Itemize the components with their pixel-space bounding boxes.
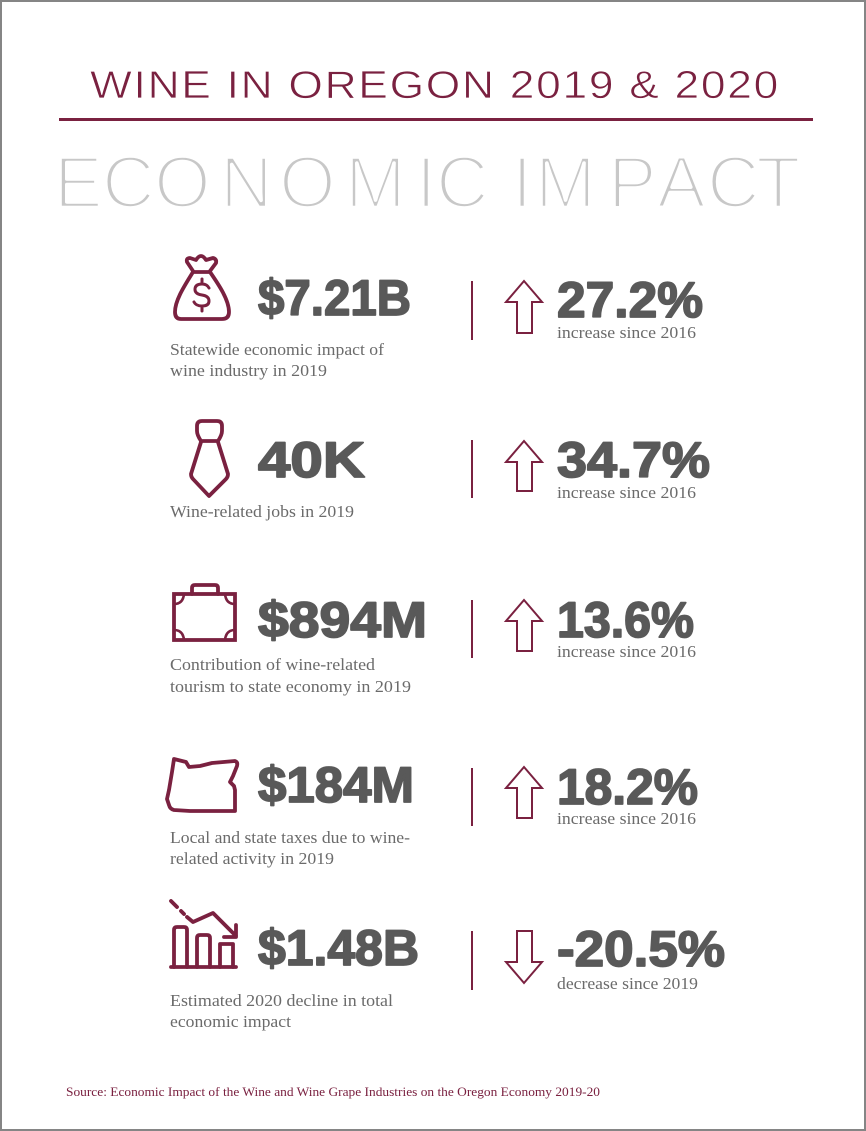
icon: Oregon state outline: [167, 759, 237, 811]
description: Estimated 2020 decline in total: [170, 991, 393, 1010]
description: [170, 991, 393, 1031]
description: related activity in 2019: [170, 849, 334, 868]
change note: increase since 2016: [557, 642, 696, 661]
arrow up: [506, 281, 542, 333]
description: Statewide economic impact of: [170, 340, 385, 359]
value: $7.21B: [258, 270, 411, 326]
arrow down: [506, 931, 542, 983]
description: economic impact: [170, 1012, 291, 1031]
description: [170, 828, 410, 868]
divider: [471, 768, 473, 826]
row: tourism: [170, 585, 696, 696]
percent change: -20.5%: [557, 921, 725, 977]
icon: money bag: [175, 256, 229, 319]
row: 2020 decline: [170, 901, 725, 1031]
description: tourism to state economy in 2019: [170, 677, 411, 696]
description: wine industry in 2019: [170, 361, 327, 380]
row: jobs: [170, 421, 710, 521]
percent change: 27.2%: [557, 272, 703, 328]
percent change: 34.7%: [557, 432, 710, 488]
arrow up: [506, 600, 542, 651]
row: taxes: [167, 757, 698, 868]
percent change: 13.6%: [557, 592, 694, 648]
description: [170, 340, 385, 380]
description: Local and state taxes due to wine-: [170, 828, 410, 847]
source note: Source: Economic Impact of the Wine and Wine Grape Industries on the Oregon Economy 2019-20: [66, 1084, 600, 1099]
description: Contribution of wine-related: [170, 655, 376, 674]
arrow up: [506, 767, 542, 818]
icon: declining bar chart: [171, 901, 236, 967]
divider: [471, 931, 473, 990]
subtitle: economic impact: ECONOMIC IMPACT: [54, 142, 801, 224]
value: $184M: [258, 757, 414, 813]
description: [170, 655, 411, 696]
change note: increase since 2016: [557, 483, 696, 502]
arrow up: [506, 441, 542, 491]
value: $1.48B: [258, 920, 419, 976]
value: $894M: [258, 592, 427, 648]
row: statewide economic impact: [170, 256, 703, 380]
title rule: [59, 118, 813, 121]
value: 40K: [258, 432, 365, 488]
percent change: 18.2%: [557, 759, 698, 815]
change note: increase since 2016: [557, 323, 696, 342]
icon: necktie: [191, 421, 228, 496]
divider: [471, 440, 473, 498]
divider: [471, 281, 473, 340]
change note: increase since 2016: [557, 809, 696, 828]
change note: decrease since 2019: [557, 974, 698, 993]
icon: briefcase: [174, 585, 235, 640]
description: Wine-related jobs in 2019: [170, 502, 354, 521]
divider: [471, 600, 473, 658]
title: WINE IN OREGON 2019 & 2020: [90, 64, 780, 107]
